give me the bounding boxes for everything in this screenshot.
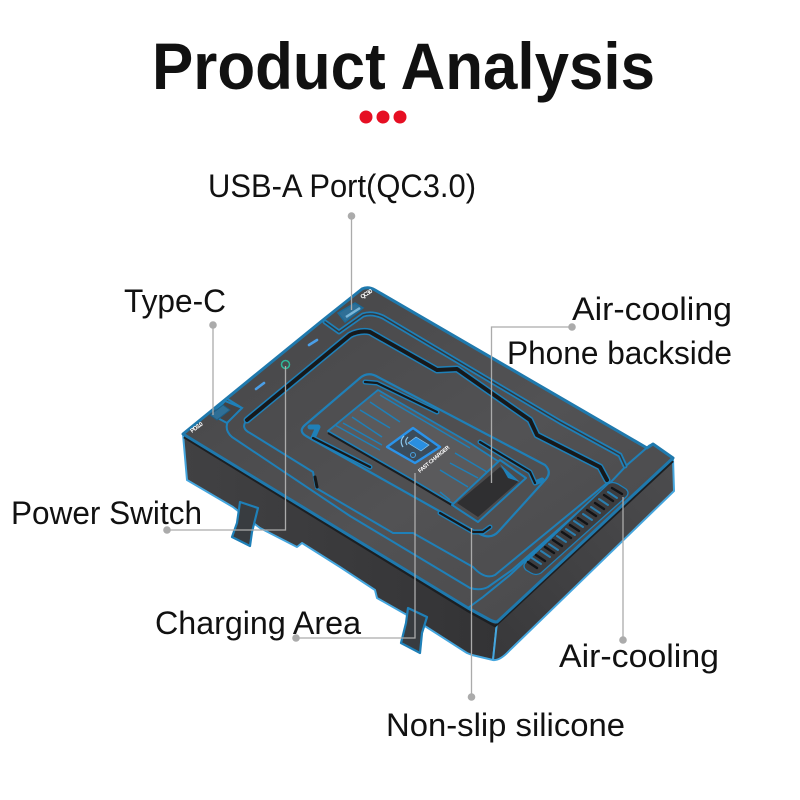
fast charger label: FAST CHARGER [417,445,451,475]
wireless arcs in badge [401,436,408,447]
notch [315,477,317,487]
housing edge near type-c [226,398,242,408]
foot left [232,502,258,546]
fast charger badge [387,428,440,463]
recess outline lower [244,420,607,576]
label: Charging Area: Charging Area [155,605,361,641]
device top face [183,288,673,622]
label: Air-cooling side: Air-cooling [559,638,719,674]
type-c port: PD3.0 [190,421,205,435]
front side wall [493,458,674,660]
front strip line [468,445,650,608]
housing line [227,408,607,589]
leader: Air-cooling side [619,497,627,644]
leader: Air-cooling phone backside [492,323,576,483]
slots [310,382,542,532]
recess dark band [247,331,607,480]
leader: Non-slip silicone [468,528,475,701]
upper channels [325,314,625,466]
label: Phone backside: Phone backside [507,335,732,371]
label: Type-C: Type-C [124,283,226,319]
label: Non-slip silicone: Non-slip silicone [386,707,625,743]
plate dark lower edge [328,433,455,507]
leader: Power Switch [163,366,286,534]
dark phone vent window [452,460,526,522]
ribs on charging plate [335,395,487,500]
type-c port [190,401,242,435]
leader: Type-C [209,321,217,415]
usb-a port [338,288,375,322]
wall ledge shadow [184,437,673,626]
red dots [360,110,406,124]
left side wall [183,434,497,660]
leader: USB-A [348,212,355,310]
label: USB-A Port: USB-A Port(QC3.0) [208,168,476,204]
phone glyph in badge [408,437,429,451]
leader: Charging Area [292,473,415,642]
label: Power Switch: Power Switch [11,495,202,531]
foot right [401,608,427,653]
power switch icon [282,360,290,368]
side air vent [524,482,628,574]
title: Product Analysis [152,29,655,103]
product: wireless charger tray [183,288,674,660]
label: Air-cooling top: Air-cooling [572,291,732,327]
hand glyph in badge [410,452,416,458]
charging panel inner plate [328,390,524,518]
charging panel outline [302,374,549,536]
indicator lights [256,340,317,389]
usb-a port: QC3.0 [360,288,375,301]
